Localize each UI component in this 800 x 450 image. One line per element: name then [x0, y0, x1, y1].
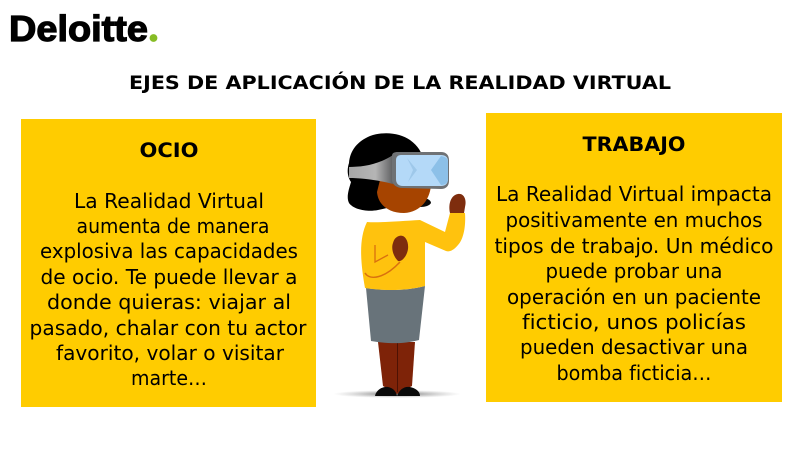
- headset strap: [349, 155, 393, 184]
- floor shadow: [333, 390, 461, 398]
- hand on chest: [392, 236, 408, 261]
- panel: trabajo: [486, 113, 782, 402]
- shoes: [375, 387, 397, 396]
- raised hand: [449, 194, 466, 213]
- text block: trabajo description: puede probar una: [546, 259, 722, 283]
- illustration: woman with VR headset: [333, 133, 466, 398]
- logo: Deloitte: Deloitte: [9, 8, 148, 49]
- hair: [348, 133, 423, 211]
- face: [377, 180, 431, 213]
- text block: ocio description: donde quieras: viajar al: [47, 290, 291, 314]
- text block: ocio description: explosiva las capacidades: [40, 239, 298, 263]
- text block: ocio description: aumenta de manera: [76, 214, 270, 238]
- text block: trabajo description: positivamente en muchos: [506, 208, 762, 232]
- text block: ocio description: pasado, chalar con tu actor: [30, 316, 307, 340]
- sweater: [361, 213, 465, 290]
- headset frame: [392, 152, 449, 189]
- text block: ocio description: La Realidad Virtual: [74, 189, 264, 213]
- text block: trabajo description: bomba ficticia…: [556, 361, 712, 385]
- text block: trabajo description: operación en un paciente: [507, 285, 761, 309]
- text block: trabajo description: ficticio, unos policías: [522, 310, 746, 334]
- text block: trabajo description: tipos de trabajo. Un médico: [494, 234, 774, 258]
- skirt: [366, 286, 425, 343]
- heading: trabajo: TRABAJO: [582, 133, 686, 156]
- text block: trabajo description: [494, 182, 774, 385]
- lens chevrons: [407, 158, 417, 182]
- headset lens: [396, 155, 448, 186]
- hair right lock: [414, 196, 431, 207]
- text block: trabajo description: La Realidad Virtual impacta: [496, 182, 772, 206]
- sweater fold: [365, 262, 400, 277]
- text block: ocio description: marte…: [131, 366, 207, 390]
- text block: ocio description: favorito, volar o visitar: [56, 341, 285, 365]
- legs: [378, 342, 415, 394]
- title: EJES DE APLICACIÓN DE LA REALIDAD VIRTUAL: [129, 70, 671, 94]
- text block: trabajo description: pueden desactivar una: [520, 335, 748, 359]
- text block: ocio description: [30, 189, 307, 390]
- panel: ocio: [21, 119, 316, 407]
- heading: ocio: OCIO: [140, 139, 198, 162]
- text block: ocio description: de ocio. Te puede llevar a: [40, 265, 298, 289]
